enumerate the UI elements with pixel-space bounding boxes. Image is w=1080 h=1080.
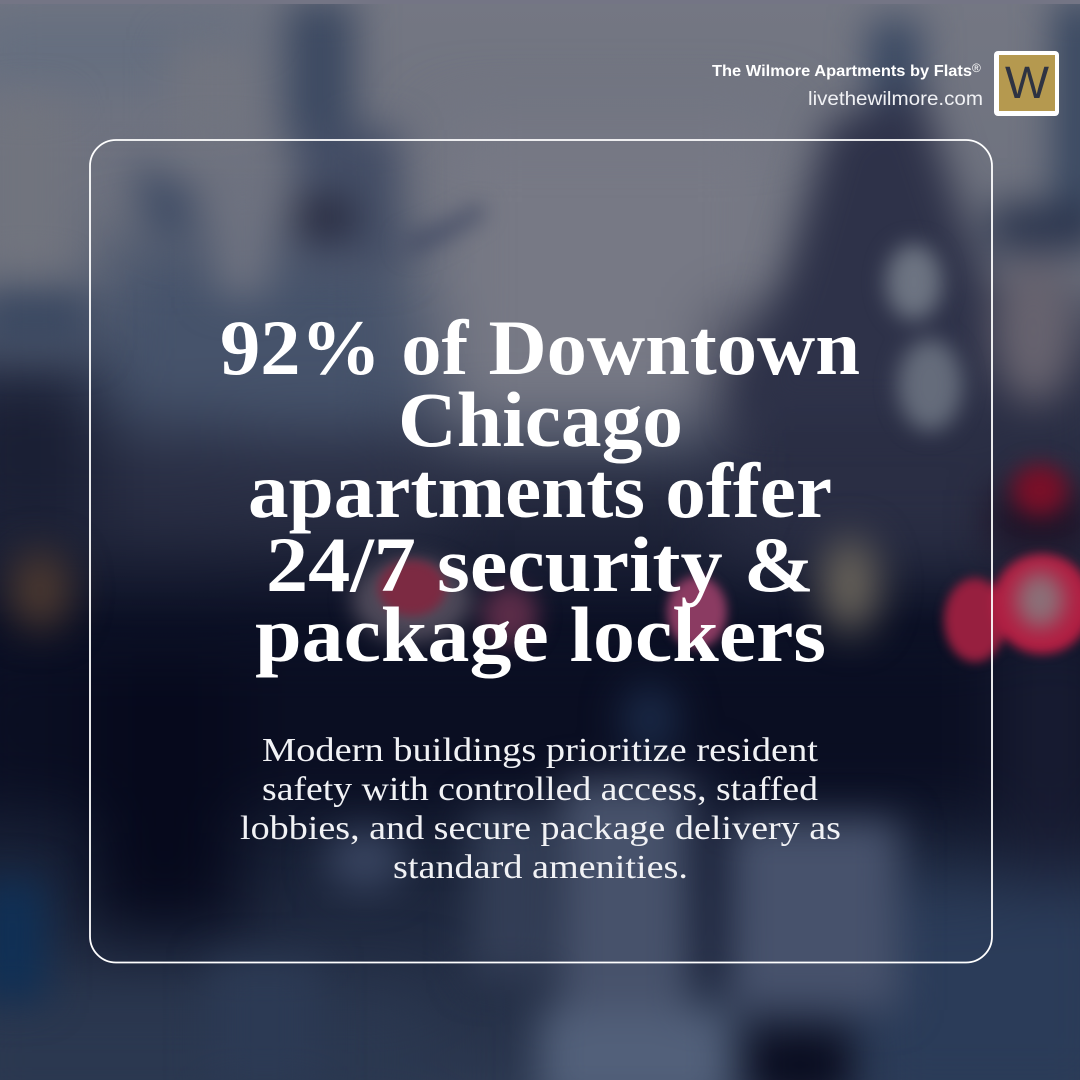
supporting text block: lobbies, and secure package delivery as: [240, 810, 841, 847]
brand name and website: The Wilmore Apartments by Flats: [712, 63, 972, 80]
brand name and website: [712, 61, 983, 110]
supporting text block: safety with controlled access, staffed: [262, 771, 818, 808]
heading: 24/7 security &: [266, 521, 814, 608]
heading: [220, 304, 860, 678]
heading: 92% of Downtown: [220, 304, 860, 391]
supporting text block: Modern buildings prioritize resident: [262, 732, 819, 769]
supporting text block: [240, 732, 841, 886]
brand name and website: ®: [972, 61, 981, 75]
supporting text block: standard amenities.: [393, 849, 688, 886]
heading: apartments offer: [248, 447, 832, 534]
heading: Chicago: [398, 376, 683, 463]
logo: W badge: W: [1005, 57, 1050, 108]
panel: rounded white outline frame: [90, 140, 992, 962]
logo: W badge: [994, 51, 1059, 116]
heading: package lockers: [255, 591, 826, 678]
brand name and website: livethewilmore.com: [808, 89, 983, 110]
